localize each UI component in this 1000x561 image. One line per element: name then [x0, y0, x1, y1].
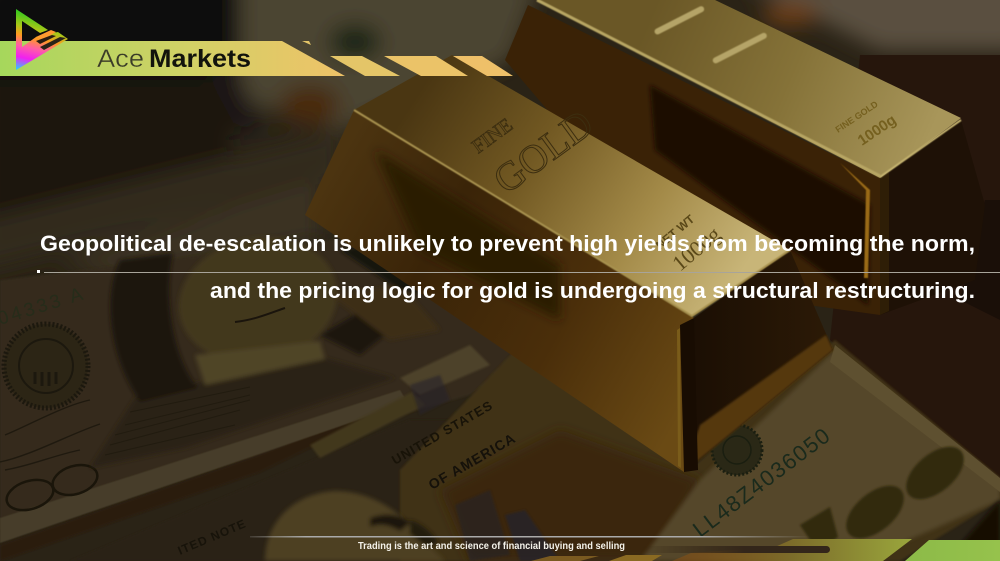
headline: Geopolitical de-escalation is unlikely to prevent high yields from becoming the norm,	[40, 231, 975, 256]
gold bar: rear: 1000g	[855, 111, 900, 149]
header banner	[0, 41, 513, 76]
right note serial and 100: LL48Z4036050	[688, 422, 836, 542]
gold bar: rear: FINE GOLD	[834, 99, 880, 135]
lower left banknote strip	[0, 390, 408, 543]
footer: Trading is the art and science of financial buying and selling	[358, 541, 625, 552]
banner stripes	[302, 41, 513, 76]
logo	[16, 9, 68, 70]
brand name: Ace	[97, 45, 144, 73]
seal left	[4, 324, 88, 408]
footer bands	[531, 539, 1000, 561]
Franklin portrait lower	[265, 491, 445, 561]
gold bar: front	[305, 55, 833, 472]
signature scribbles	[0, 400, 100, 470]
gold bar: rear	[505, 0, 985, 315]
100 rings left	[3, 460, 101, 515]
seal right	[712, 425, 762, 475]
footer	[250, 536, 1000, 561]
engraved FINE GOLD text: FINE	[468, 114, 517, 158]
header banner: Markets	[149, 45, 251, 73]
gold bar: front: NET WT	[653, 212, 698, 252]
gold bar: front: 1000g	[667, 221, 725, 276]
gold bar: front: GOLD	[485, 101, 601, 202]
Franklin portrait upper	[90, 223, 470, 468]
wood, right side	[830, 55, 1000, 485]
divider line	[37, 270, 1000, 273]
left banknote	[0, 235, 560, 530]
headline: and the pricing logic for gold is undergoing a structural restructuring.	[210, 278, 975, 303]
headline	[37, 231, 1000, 303]
lit bill at lower right	[640, 350, 1000, 561]
photo background: banknotes on wood: ITED NOTE	[176, 516, 248, 558]
photo background: banknotes on wood: OF AMERICA	[426, 430, 519, 493]
purple security ribbons	[455, 490, 510, 561]
blurred upper banknotes	[0, 0, 1000, 280]
ornate lettering: UNITED STATES	[389, 397, 496, 468]
wood gap	[0, 385, 440, 561]
central lower banknote	[400, 340, 1000, 561]
